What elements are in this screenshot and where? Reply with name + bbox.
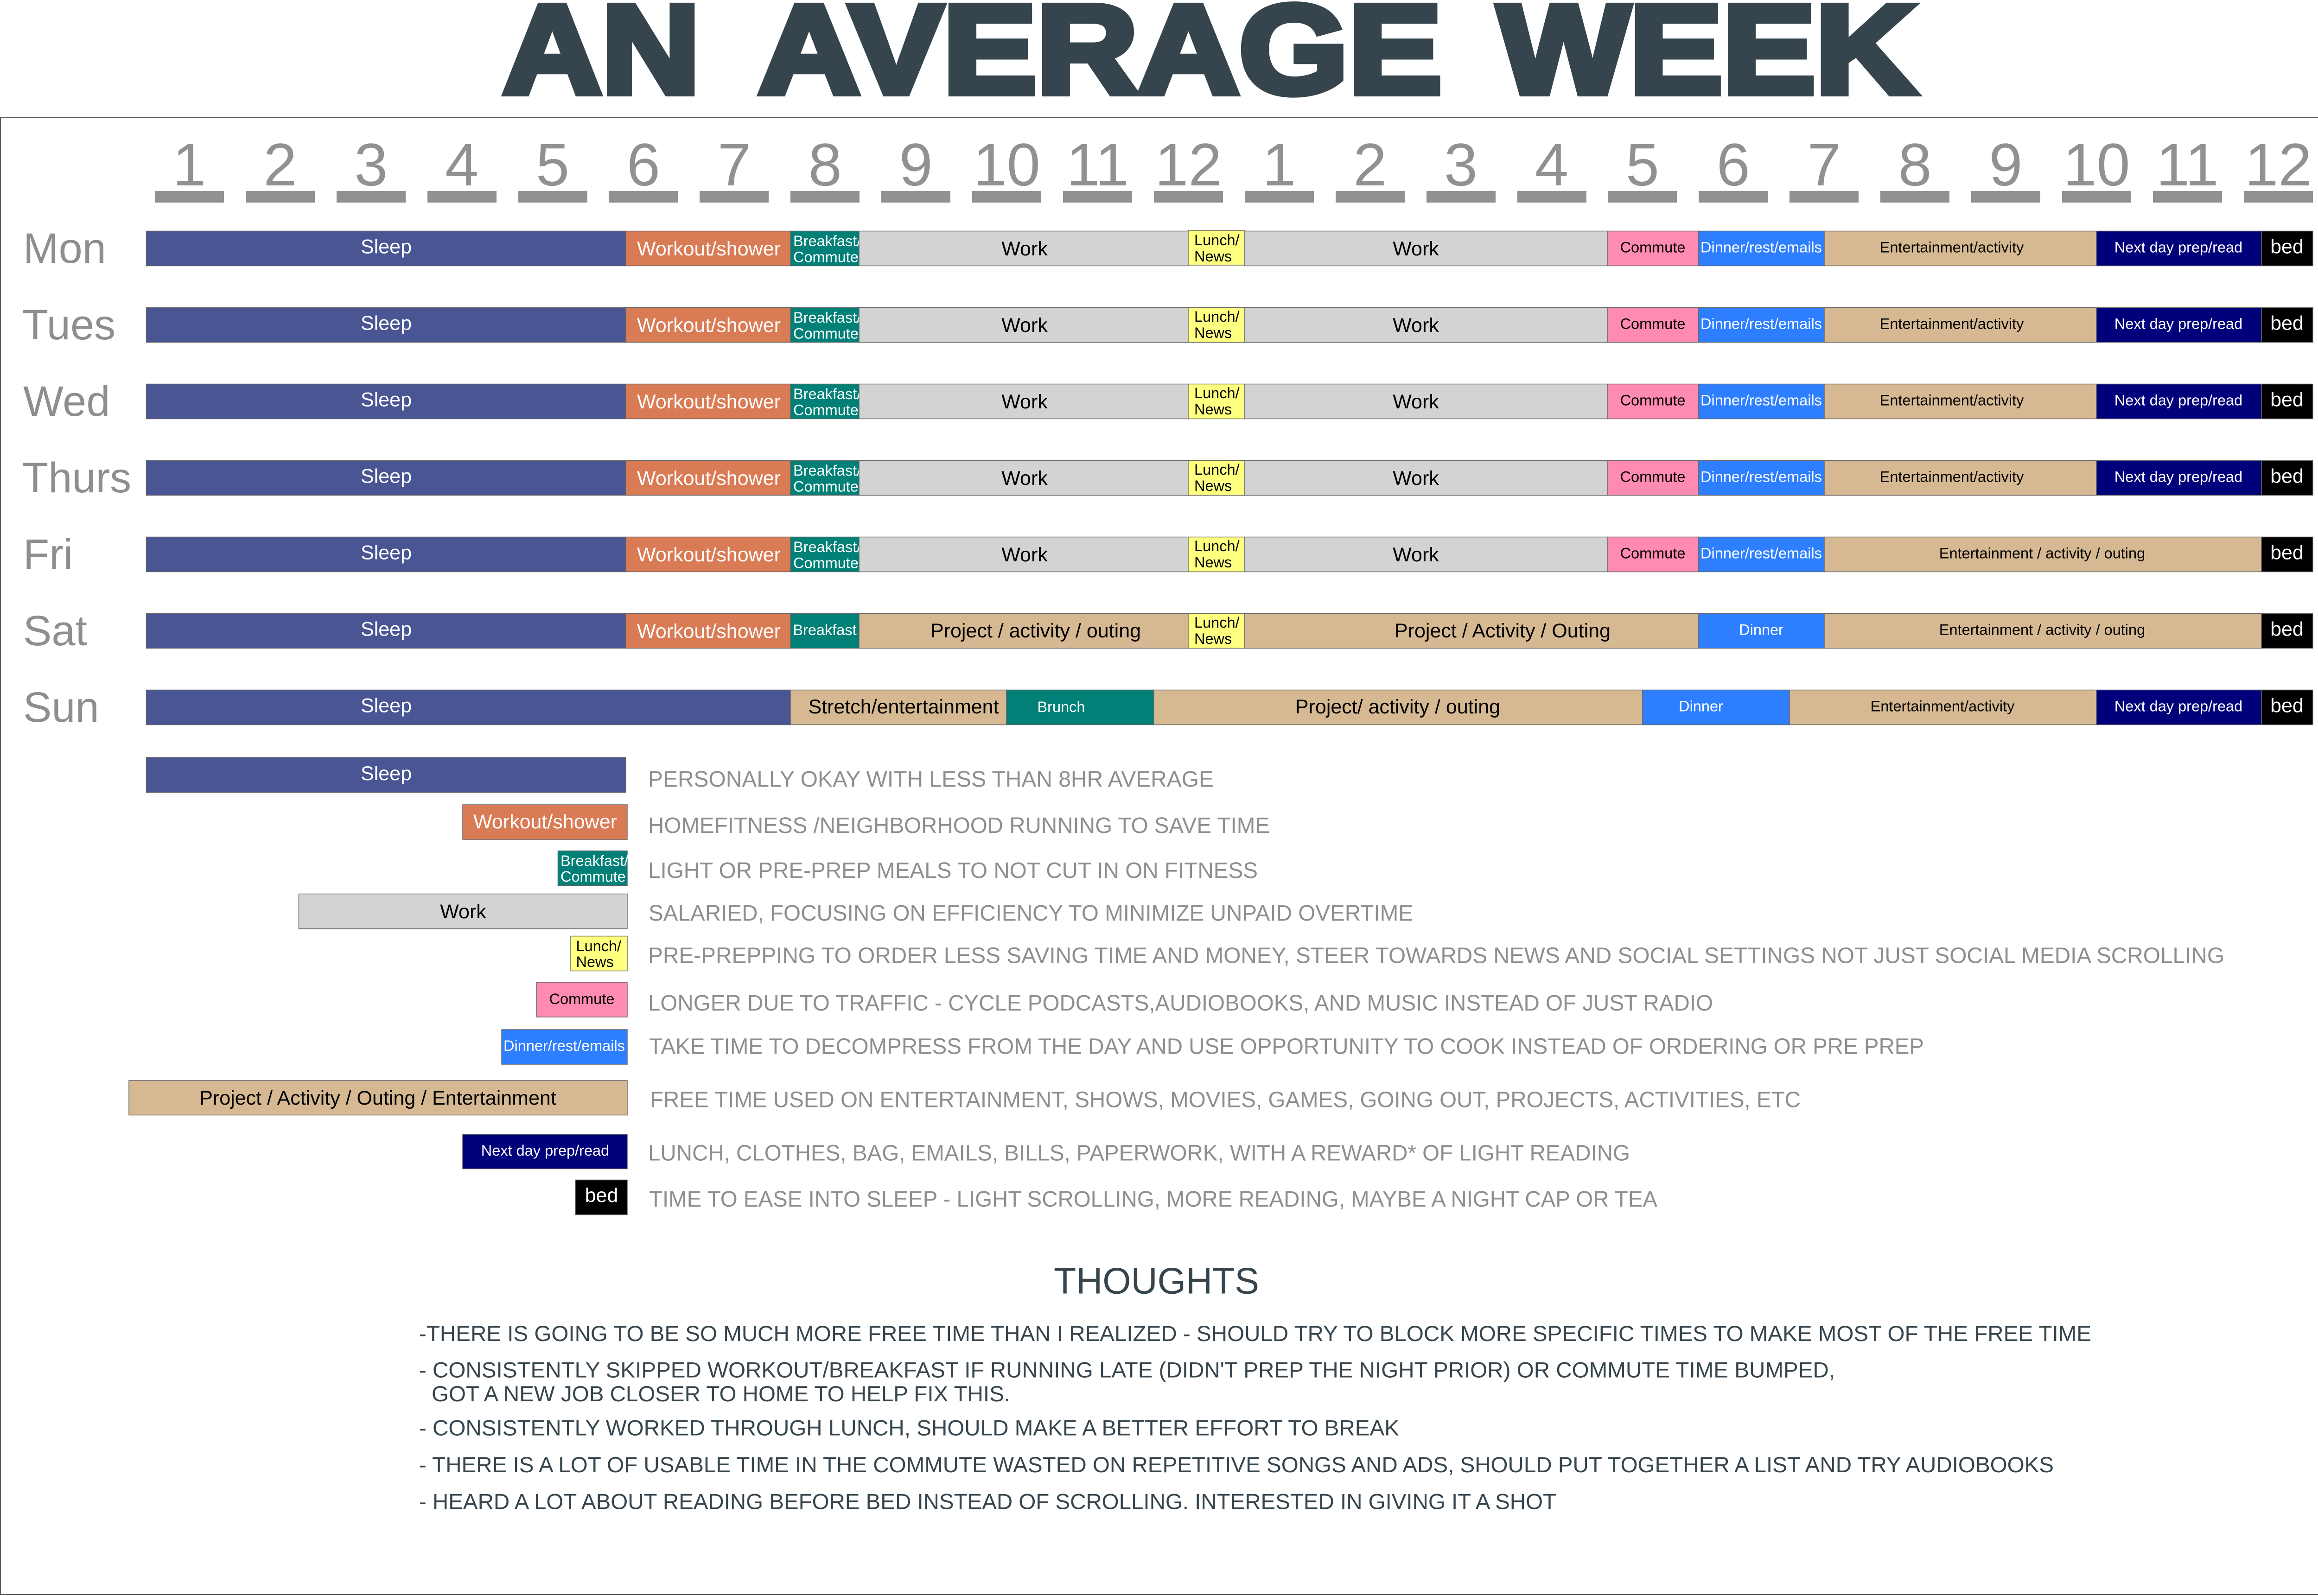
Lunch/News [1188, 537, 1244, 572]
Workout/shower: Workout/shower [637, 544, 781, 566]
Work: Work [1001, 467, 1048, 490]
legend: Sleep: PERSONALLY OKAY WITH LESS THAN 8HR AVERAGE [648, 767, 1214, 792]
legend: Commute: LONGER DUE TO TRAFFIC - CYCLE PODCASTS,AUDIOBOOKS, AND MUSIC INSTEAD OF JUST RADIO [648, 991, 1713, 1016]
Work [859, 461, 1188, 495]
Sleep: Sleep [361, 312, 412, 335]
day label: Mon [23, 225, 106, 272]
legend: Commute [537, 982, 1713, 1017]
Work [1244, 461, 1608, 495]
hour axis: 7 [1808, 131, 1841, 198]
Lunch/News [1188, 230, 1244, 265]
Next day prep/read [2096, 308, 2261, 342]
Next day prep/read: Next day prep/read [2114, 392, 2242, 409]
Work: Work [1393, 544, 1439, 566]
legend: Next day prep/read: Next day prep/read [481, 1142, 609, 1159]
row: Mon [23, 225, 2313, 272]
Next day prep/read [2096, 690, 2261, 725]
legend: bed: TIME TO EASE INTO SLEEP - LIGHT SCROLLING, MORE READING, MAYBE A NIGHT CAP OR TEA [649, 1187, 1657, 1212]
Workout/shower: Workout/shower [637, 391, 781, 413]
Work: Work [1393, 314, 1439, 337]
hour axis: 5 [536, 131, 569, 198]
Workout/shower [626, 537, 790, 572]
Brunch [1006, 690, 1154, 725]
day label: Wed [23, 378, 110, 425]
Sleep [146, 308, 626, 342]
legend: Workout/shower [463, 805, 1270, 839]
Commute: Commute [1620, 468, 1685, 485]
Lunch/News: Lunch/ [1194, 461, 1240, 478]
Entertainment/activity: Entertainment/activity [1871, 698, 2015, 715]
Breakfast/Commute: Breakfast/ [793, 309, 861, 326]
Entertainment/activity: Entertainment/activity [1880, 392, 2024, 409]
Workout/shower [626, 614, 790, 648]
hour axis: 3 [354, 131, 388, 198]
Breakfast/Commute [790, 308, 861, 342]
day label: Sun [23, 684, 99, 731]
Lunch/News: News [1194, 554, 1232, 571]
Commute: Commute [1620, 545, 1685, 562]
thoughts text block: - HEARD A LOT ABOUT READING BEFORE BED INSTEAD OF SCROLLING. INTERESTED IN GIVING IT A SHOT [419, 1489, 1556, 1514]
Work [1244, 231, 1608, 266]
Project / activity / outing: Project / activity / outing [930, 620, 1141, 642]
Sleep [146, 690, 790, 725]
Entertainment / activity / outing [1824, 614, 2261, 648]
Dinner [1699, 614, 1824, 648]
Dinner/rest/emails: Dinner/rest/emails [1700, 468, 1822, 485]
Dinner: Dinner [1679, 698, 1723, 715]
Dinner/rest/emails [1699, 384, 1824, 419]
hour axis: 1 [1262, 131, 1296, 198]
hour axis: 2 [1353, 131, 1387, 198]
legend: Project / Activity / Outing / Entertainment [129, 1081, 1801, 1115]
row: Sun [23, 684, 2313, 731]
hour axis: 9 [899, 131, 933, 198]
legend: Workout/shower: Workout/shower [473, 811, 617, 833]
Work [1244, 308, 1608, 342]
Commute [1608, 308, 1699, 342]
legend: Lunch/News: PRE-PREPPING TO ORDER LESS SAVING TIME AND MONEY, STEER TOWARDS NEWS AND SOCIAL SETTINGS NOT JUST SOCIAL MEDIA SCROLLING [648, 944, 2224, 968]
bed [2261, 308, 2313, 342]
Work [1244, 384, 1608, 419]
Breakfast/Commute: Breakfast/ [793, 386, 861, 402]
row: Tues [22, 301, 2313, 349]
Workout/shower [626, 308, 790, 342]
Commute [1608, 461, 1699, 495]
legend: Breakfast/Commute: LIGHT OR PRE-PREP MEALS TO NOT CUT IN ON FITNESS [648, 858, 1258, 883]
Stretch/entertainment: Stretch/entertainment [808, 696, 999, 718]
Sleep: Sleep [361, 465, 412, 488]
Dinner/rest/emails: Dinner/rest/emails [1700, 315, 1822, 332]
day label: Sat [23, 607, 87, 655]
thoughts text block: - CONSISTENTLY WORKED THROUGH LUNCH, SHOULD MAKE A BETTER EFFORT TO BREAK [419, 1416, 1399, 1440]
Next day prep/read [2096, 384, 2261, 419]
Sleep: Sleep [361, 235, 412, 258]
thoughts text block: -THERE IS GOING TO BE SO MUCH MORE FREE TIME THAN I REALIZED - SHOULD TRY TO BLOCK MORE SPECIFIC TIMES TO MAKE MOST OF THE FREE TIME [419, 1321, 2091, 1346]
legend: Project / Activity / Outing / Entertainment: FREE TIME USED ON ENTERTAINMENT, SHOWS, MOVIES, GAMES, GOING OUT, PROJECTS, ACTIVITIES, ETC [650, 1087, 1801, 1113]
Breakfast/Commute [790, 231, 861, 266]
legend: Lunch/News: News [576, 954, 614, 970]
legend: Workout/shower: HOMEFITNESS /NEIGHBORHOOD RUNNING TO SAVE TIME [648, 814, 1270, 838]
Dinner/rest/emails [1699, 537, 1824, 572]
Stretch/entertainment [790, 690, 1006, 725]
thoughts text block [419, 1321, 2091, 1514]
Commute: Commute [1620, 239, 1685, 256]
legend: Breakfast/Commute: Breakfast/ [560, 852, 629, 869]
Entertainment/activity [1789, 690, 2096, 725]
legend [129, 757, 2224, 1214]
Entertainment/activity [1824, 461, 2096, 495]
Sleep [146, 537, 626, 572]
legend: Lunch/News: Lunch/ [576, 938, 622, 954]
Work: Work [1001, 544, 1048, 566]
Entertainment/activity [1824, 231, 2096, 266]
Workout/shower: Workout/shower [637, 314, 781, 337]
Commute [1608, 231, 1699, 266]
legend: Work: SALARIED, FOCUSING ON EFFICIENCY TO MINIMIZE UNPAID OVERTIME [649, 901, 1413, 926]
row: Thurs [22, 454, 2313, 502]
Entertainment / activity / outing: Entertainment / activity / outing [1939, 621, 2145, 638]
hour axis [155, 131, 2313, 203]
Project / activity / outing [859, 614, 1188, 648]
bed [2261, 537, 2313, 572]
legend: Dinner/rest/emails [502, 1030, 1924, 1064]
Lunch/News: Lunch/ [1194, 308, 1240, 325]
Work [859, 537, 1188, 572]
row: Fri [23, 531, 2313, 578]
hour axis: 7 [718, 131, 751, 198]
Dinner [1643, 690, 1789, 725]
Sleep [146, 384, 626, 419]
bed: bed [2270, 694, 2304, 717]
day label: Fri [23, 531, 73, 578]
Work: Work [1393, 467, 1439, 490]
thoughts text block: - THERE IS A LOT OF USABLE TIME IN THE COMMUTE WASTED ON REPETITIVE SONGS AND ADS, SHOULD PUT TOGETHER A LIST AND TRY AUDIOBOOKS [419, 1452, 2054, 1477]
title [503, 0, 1916, 120]
legend: Dinner/rest/emails: TAKE TIME TO DECOMPRESS FROM THE DAY AND USE OPPORTUNITY TO COOK INSTEAD OF ORDERING OR PRE PREP [649, 1035, 1924, 1059]
Next day prep/read: Next day prep/read [2114, 468, 2242, 485]
Work [1244, 537, 1608, 572]
Sleep [146, 461, 626, 495]
bed [2261, 690, 2313, 725]
bed: bed [2270, 618, 2304, 641]
Sleep: Sleep [361, 388, 412, 411]
Dinner/rest/emails [1699, 461, 1824, 495]
Breakfast: Breakfast [793, 622, 857, 638]
hour axis: 4 [1535, 131, 1568, 198]
hour axis: 12 [1155, 131, 1222, 198]
Breakfast/Commute: Breakfast/ [793, 233, 861, 249]
Breakfast/Commute: Breakfast/ [793, 462, 861, 479]
legend: Next day prep/read [463, 1134, 1630, 1169]
hour axis: 6 [1717, 131, 1750, 198]
hour axis: 10 [973, 131, 1040, 198]
Sleep [146, 231, 626, 266]
hour axis: 2 [263, 131, 297, 198]
thoughts text block: GOT A NEW JOB CLOSER TO HOME TO HELP FIX THIS. [432, 1381, 1010, 1406]
hour axis: 9 [1989, 131, 2023, 198]
Work [859, 308, 1188, 342]
Lunch/News [1188, 614, 1244, 648]
legend: Work: Work [440, 901, 486, 923]
legend: Lunch/News [571, 936, 2224, 971]
Workout/shower: Workout/shower [637, 238, 781, 260]
Work: Work [1001, 391, 1048, 413]
Breakfast/Commute: Commute [793, 248, 859, 265]
Dinner: Dinner [1739, 621, 1783, 638]
Project/ activity / outing [1154, 690, 1643, 725]
Breakfast [790, 614, 859, 648]
Lunch/News: News [1194, 630, 1232, 647]
Sleep: Sleep [361, 541, 412, 564]
Work [859, 384, 1188, 419]
Breakfast/Commute [790, 461, 861, 495]
bed [2261, 384, 2313, 419]
Dinner/rest/emails: Dinner/rest/emails [1700, 239, 1822, 256]
Lunch/News: Lunch/ [1194, 538, 1240, 554]
hour axis: 11 [1066, 131, 1129, 198]
row: Sat [23, 607, 2313, 655]
Workout/shower: Workout/shower [637, 620, 781, 642]
Lunch/News: News [1194, 324, 1232, 341]
Lunch/News: Lunch/ [1194, 614, 1240, 631]
Breakfast/Commute: Commute [793, 478, 859, 495]
Lunch/News: News [1194, 401, 1232, 418]
Next day prep/read: Next day prep/read [2114, 698, 2242, 715]
legend: Commute: Commute [549, 991, 614, 1007]
Workout/shower [626, 384, 790, 419]
bed [2261, 614, 2313, 648]
bed: bed [2270, 388, 2304, 411]
legend: Work [299, 894, 1413, 929]
Commute: Commute [1620, 392, 1685, 409]
Entertainment/activity [1824, 384, 2096, 419]
Lunch/News [1188, 384, 1244, 419]
Sleep: Sleep [361, 694, 412, 717]
bed [2261, 461, 2313, 495]
legend: Breakfast/Commute [558, 851, 1258, 885]
legend: Sleep [146, 757, 1214, 793]
legend: Sleep: Sleep [361, 763, 412, 785]
hour axis: 1 [172, 131, 206, 198]
legend: Project / Activity / Outing / Entertainment: Project / Activity / Outing / Entertainment [199, 1087, 556, 1109]
Breakfast/Commute: Commute [793, 554, 859, 571]
hour axis: 12 [2245, 131, 2312, 198]
Workout/shower [626, 461, 790, 495]
Entertainment / activity / outing: Entertainment / activity / outing [1939, 545, 2145, 562]
bed: bed [2270, 541, 2304, 564]
bed [2261, 231, 2313, 266]
Dinner/rest/emails [1699, 308, 1824, 342]
Lunch/News: News [1194, 477, 1232, 494]
Work: Work [1393, 238, 1439, 260]
hour axis: 11 [2156, 131, 2219, 198]
Lunch/News [1188, 461, 1244, 495]
bed: bed [2270, 465, 2304, 488]
day label: Thurs [22, 454, 131, 502]
Lunch/News: News [1194, 248, 1232, 265]
hour axis: 5 [1626, 131, 1659, 198]
Commute: Commute [1620, 315, 1685, 332]
Brunch: Brunch [1038, 699, 1085, 715]
hour axis: 4 [445, 131, 478, 198]
Breakfast/Commute: Commute [793, 401, 859, 418]
row: Wed [23, 378, 2313, 425]
hour axis: 8 [809, 131, 842, 198]
Lunch/News: Lunch/ [1194, 385, 1240, 401]
Lunch/News [1188, 308, 1244, 342]
day label: Tues [22, 301, 115, 349]
Dinner/rest/emails: Dinner/rest/emails [1700, 392, 1822, 409]
Work: Work [1001, 238, 1048, 260]
Entertainment/activity: Entertainment/activity [1880, 468, 2024, 485]
Entertainment / activity / outing [1824, 537, 2261, 572]
Project/ activity / outing: Project/ activity / outing [1295, 696, 1500, 718]
Project / Activity / Outing: Project / Activity / Outing [1395, 620, 1611, 642]
Workout/shower: Workout/shower [637, 467, 781, 490]
Commute [1608, 384, 1699, 419]
Entertainment/activity: Entertainment/activity [1880, 315, 2024, 332]
legend: bed: bed [585, 1184, 618, 1207]
Breakfast/Commute [790, 384, 861, 419]
hour axis: 10 [2063, 131, 2130, 198]
Next day prep/read [2096, 461, 2261, 495]
legend: Dinner/rest/emails: Dinner/rest/emails [503, 1037, 625, 1054]
Lunch/News: Lunch/ [1194, 232, 1240, 248]
Dinner/rest/emails [1699, 231, 1824, 266]
Work: Work [1001, 314, 1048, 337]
hour axis: 8 [1898, 131, 1932, 198]
Next day prep/read [2096, 231, 2261, 266]
hour axis: 3 [1444, 131, 1477, 198]
legend: Breakfast/Commute: Commute [560, 868, 626, 885]
Breakfast/Commute: Commute [793, 325, 859, 342]
Entertainment/activity [1824, 308, 2096, 342]
Sleep: Sleep [361, 618, 412, 641]
Commute [1608, 537, 1699, 572]
Dinner/rest/emails: Dinner/rest/emails [1700, 545, 1822, 562]
Next day prep/read: Next day prep/read [2114, 239, 2242, 256]
heading: thoughts: THOUGHTS [1054, 1260, 1259, 1302]
Project / Activity / Outing [1244, 614, 1699, 648]
legend: bed [575, 1180, 1657, 1214]
Sleep [146, 614, 626, 648]
bed: bed [2270, 235, 2304, 258]
bed: bed [2270, 312, 2304, 335]
thoughts text block: - CONSISTENTLY SKIPPED WORKOUT/BREAKFAST IF RUNNING LATE (DIDN'T PREP THE NIGHT PRIOR) OR COMMUTE TIME BUMPED, [419, 1357, 1835, 1382]
hour axis: 6 [627, 131, 660, 198]
Entertainment/activity: Entertainment/activity [1880, 239, 2024, 256]
legend: Next day prep/read: LUNCH, CLOTHES, BAG, EMAILS, BILLS, PAPERWORK, WITH A REWARD* OF LIGHT READING [648, 1141, 1630, 1165]
Breakfast/Commute [790, 537, 861, 572]
Workout/shower [626, 231, 790, 266]
Work [859, 231, 1188, 266]
Work: Work [1393, 391, 1439, 413]
Breakfast/Commute: Breakfast/ [793, 539, 861, 555]
Next day prep/read: Next day prep/read [2114, 315, 2242, 332]
